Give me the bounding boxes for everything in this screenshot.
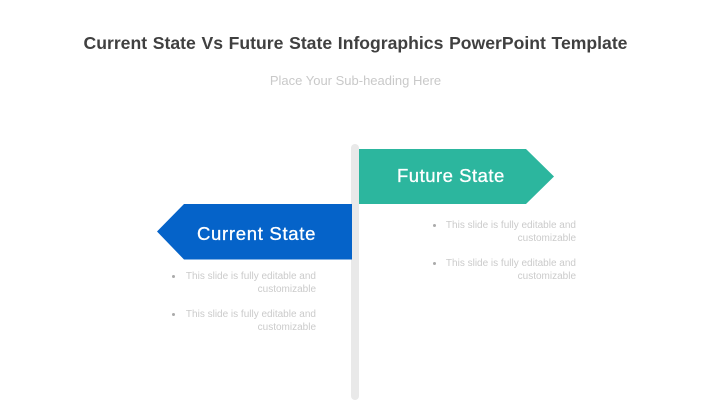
label: current state: Current State xyxy=(197,223,316,244)
bullet two xyxy=(433,258,576,282)
label: future state: Future State xyxy=(397,165,505,186)
bullet two: customizable xyxy=(518,270,576,282)
bullet one xyxy=(433,220,576,244)
text block: future state bullets xyxy=(433,220,576,282)
bullet one: This slide is fully editable and xyxy=(446,220,576,231)
bullet one: This slide is fully editable and xyxy=(186,271,316,282)
bullet one: customizable xyxy=(258,284,316,295)
bullet one: customizable xyxy=(518,233,576,244)
signpost pole xyxy=(351,144,359,400)
arrow: current state xyxy=(157,204,352,260)
title: Current State Vs Future State Infographics PowerPoint Template xyxy=(84,33,627,53)
arrow: future state xyxy=(359,149,554,204)
text block: current state bullets xyxy=(172,271,316,332)
bullet one xyxy=(172,271,316,295)
bullet two: This slide is fully editable and xyxy=(186,308,316,320)
bullet two: This slide is fully editable and xyxy=(446,258,576,268)
bullet two: customizable xyxy=(258,322,316,332)
subtitle: Place Your Sub-heading Here xyxy=(270,73,441,88)
bullet two xyxy=(172,308,316,332)
